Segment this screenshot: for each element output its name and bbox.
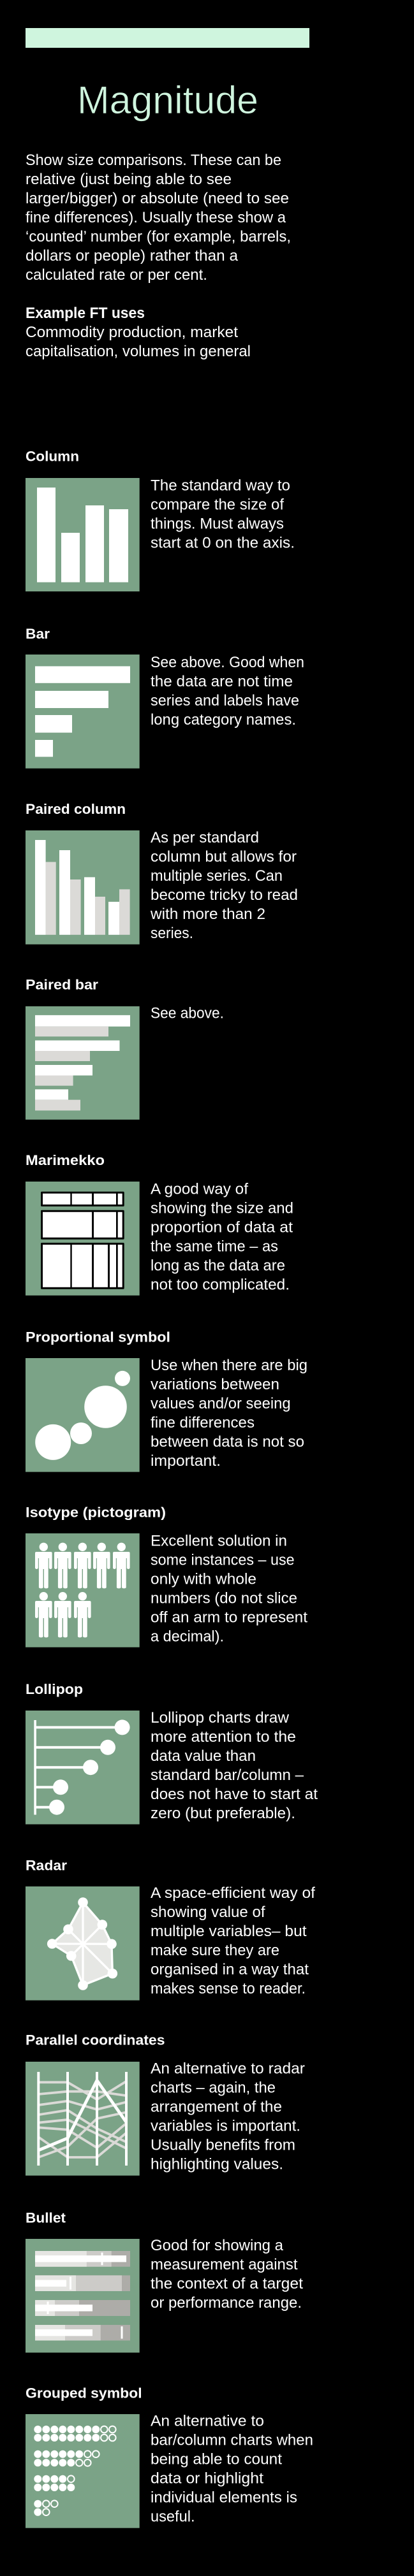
icon: paired bar chart [26,1006,140,1120]
description: radar [151,1885,315,1997]
description: isotype: numbers (do not slice [151,1590,297,1607]
description: lollipop: zero (but preferable). [151,1805,295,1822]
icon: grouped symbol chart [26,2414,140,2528]
description: radar: A space-efficient way of [151,1885,315,1902]
description: column: compare the size of [151,496,284,513]
description: parallel coordinates: charts – again, the [151,2080,276,2097]
description: column [151,477,295,551]
description: radar: showing value of [151,1904,265,1921]
intro text block: fine differences). Usually these show a [26,209,286,226]
heading: grouped symbol: Grouped symbol [26,2385,142,2401]
intro text block: dollars or people) rather than a [26,247,239,264]
description: parallel coordinates: Usually benefits from [151,2137,295,2154]
section: paired column [26,801,298,944]
example FT uses: capitalisation, volumes in general [26,343,251,360]
description: marimekko [151,1181,293,1294]
example FT uses: Commodity production, market [26,324,238,341]
example FT uses: Example FT uses [26,305,145,322]
description: paired column: with more than 2 [150,906,265,923]
description: proportional symbol: important. [151,1452,221,1470]
description: proportional symbol: fine differences [151,1414,255,1431]
section: grouped symbol [26,2385,313,2528]
description: isotype [151,1533,307,1646]
description: isotype: off an arm to represent [151,1609,307,1626]
description: bullet [151,2237,303,2312]
description: bar: See above. Good when [151,654,304,671]
description: radar: make sure they are [151,1942,279,1959]
description: proportional symbol [151,1357,307,1470]
description: parallel coordinates [151,2060,305,2173]
description: bar: long category names. [151,711,296,728]
description: bullet: the context of a target [151,2275,303,2292]
intro text block: larger/bigger) or absolute (need to see [26,190,289,207]
heading: lollipop: Lollipop [26,1681,83,1697]
section: radar [26,1857,315,2001]
section: bullet [26,2210,303,2353]
heading: bar: Bar [26,626,50,642]
description: radar: multiple variables– but [151,1923,307,1940]
description: marimekko: showing the size and [151,1200,293,1217]
description: lollipop: standard bar/column – [151,1767,304,1784]
description: radar: organised in a way that [151,1961,309,1978]
heading: isotype: Isotype (pictogram) [26,1505,166,1521]
intro text block: ‘counted’ number (for example, barrels, [26,228,291,245]
description: marimekko: the same time – as [151,1238,278,1255]
title: Magnitude [77,78,258,122]
intro text block: relative (just being able to see [26,171,232,188]
description: isotype: Excellent solution in [151,1533,287,1550]
section: paired bar [26,976,224,1120]
icon: radar chart [26,1886,140,2001]
description: marimekko: long as the data are [151,1257,285,1275]
description: proportional symbol: Use when there are big [151,1357,307,1374]
description: lollipop: does not have to start at [151,1786,318,1803]
description: bullet: Good for showing a [151,2237,284,2254]
icon: bar chart [26,655,140,769]
description: bullet: measurement against [151,2256,298,2273]
heading: bullet: Bullet [26,2210,66,2225]
description: bar: series and labels have [151,692,299,709]
description: parallel coordinates: An alternative to radar [151,2060,305,2078]
description: grouped symbol: useful. [151,2508,195,2525]
description: marimekko: A good way of [151,1181,248,1198]
description: bullet: or performance range. [151,2294,302,2312]
description: paired column: multiple series. Can [151,867,283,885]
heading: parallel coordinates: Parallel coordinates [26,2032,165,2048]
intro text block [26,152,291,284]
heading: paired bar: Paired bar [26,976,98,993]
description: lollipop: more attention to the [151,1728,296,1746]
description: parallel coordinates: variables is important. [151,2118,300,2135]
description: isotype: some instances – use [151,1552,295,1569]
description: paired column: column but allows for [151,848,297,865]
description: grouped symbol: data or highlight [151,2470,263,2487]
description: bar: the data are not time [151,673,293,690]
description: paired column: become tricky to read [151,886,298,904]
description: lollipop [151,1709,318,1822]
intro text block: Show size comparisons. These can be [26,152,281,169]
heading: proportional symbol: Proportional symbol [26,1329,170,1345]
icon: lollipop chart [26,1711,140,1824]
header bar [26,28,309,48]
description: proportional symbol: values and/or seeing [151,1395,291,1412]
description: grouped symbol: being able to count [151,2451,282,2468]
section: proportional symbol [26,1329,307,1472]
icon: marimekko chart [26,1182,140,1296]
description: column: start at 0 on the axis. [151,534,295,551]
description: paired column: As per standard [151,829,259,846]
description: proportional symbol: between data is not so [151,1433,304,1451]
section: lollipop [26,1681,318,1824]
description: grouped symbol: An alternative to [151,2413,264,2429]
section: column [26,449,295,591]
description: lollipop: data value than [151,1747,256,1765]
description: bar [151,654,304,728]
description: radar: makes sense to reader. [151,1980,306,1997]
description: grouped symbol [151,2413,313,2525]
intro text block: calculated rate or per cent. [26,266,207,284]
description: parallel coordinates: arrangement of the [151,2099,282,2116]
icon: parallel coordinates chart [26,2062,140,2176]
heading: column: Column [26,449,79,465]
icon: proportional symbol chart [26,1358,140,1472]
description: paired column [150,829,298,942]
section: bar [26,626,304,769]
description: isotype: a decimal). [151,1628,224,1646]
description: column: The standard way to [151,477,290,494]
heading: marimekko: Marimekko [26,1152,105,1168]
section: isotype [26,1505,307,1647]
description: paired bar: See above. [151,1004,224,1022]
heading: radar: Radar [26,1857,67,1873]
icon: column chart [26,478,140,591]
description: parallel coordinates: highlighting values. [151,2156,283,2173]
description: column: things. Must always [151,515,284,532]
description: marimekko: not too complicated. [151,1277,290,1294]
description: paired column: series. [151,925,193,942]
description: marimekko: proportion of data at [151,1219,293,1236]
example FT uses [26,305,251,360]
icon: paired column chart [26,830,140,944]
description: lollipop: Lollipop charts draw [151,1709,290,1726]
heading: paired column: Paired column [26,801,126,817]
section: parallel coordinates [26,2032,305,2176]
icon: bullet chart [26,2239,140,2353]
description: isotype: only with whole [151,1571,256,1588]
description: grouped symbol: bar/column charts when [151,2432,313,2449]
description: proportional symbol: variations between [151,1376,279,1393]
section: marimekko [26,1152,293,1296]
description: grouped symbol: individual elements is [151,2489,297,2506]
icon: isotype chart [26,1533,140,1647]
